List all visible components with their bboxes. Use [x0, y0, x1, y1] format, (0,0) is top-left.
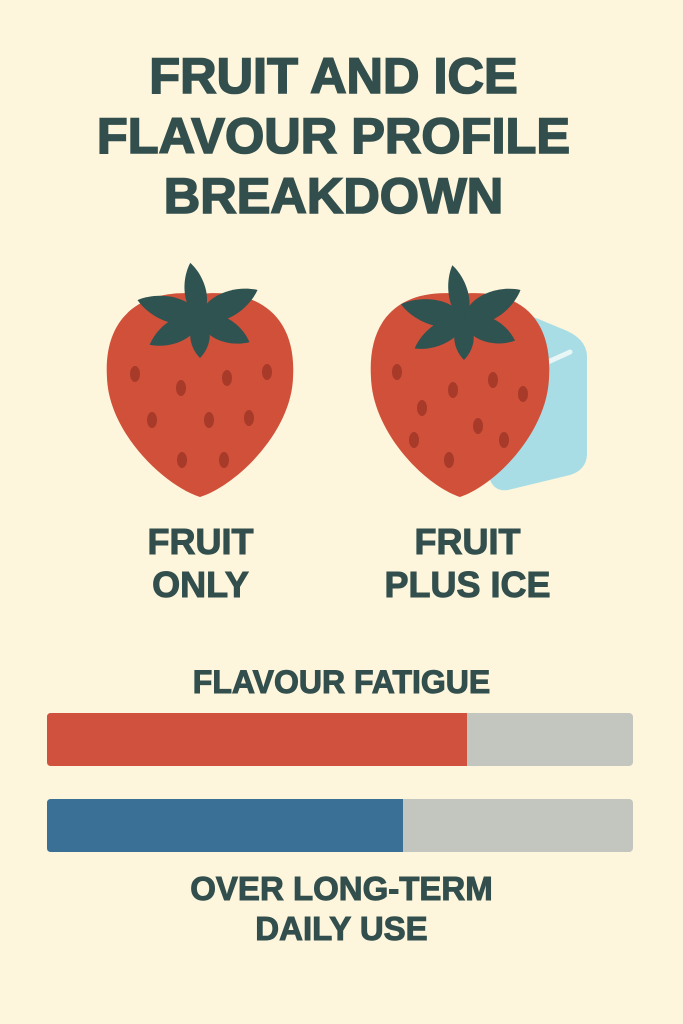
label: fruit plus ice	[384, 521, 551, 605]
label: fruit only	[148, 521, 254, 605]
title: FRUIT AND ICE	[149, 48, 518, 104]
bar: fruit only fatigue	[47, 713, 633, 766]
icon: ice cube	[490, 303, 587, 490]
caption	[190, 870, 493, 947]
icon: strawberry fruit plus ice	[371, 263, 549, 497]
title	[97, 48, 570, 224]
label: fruit plus ice: PLUS ICE	[384, 564, 551, 605]
label: fruit plus ice: FRUIT	[414, 521, 520, 562]
label: fruit only: FRUIT	[148, 521, 253, 562]
caption: OVER LONG-TERM	[190, 870, 493, 907]
icon: strawberry fruit only	[107, 261, 293, 497]
label: fruit only: ONLY	[152, 564, 249, 605]
caption: DAILY USE	[255, 910, 428, 947]
heading: flavour fatigue: FLAVOUR FATIGUE	[193, 664, 490, 700]
title: BREAKDOWN	[164, 168, 503, 224]
title: FLAVOUR PROFILE	[97, 108, 570, 164]
bar: fruit plus ice fatigue	[47, 799, 633, 852]
